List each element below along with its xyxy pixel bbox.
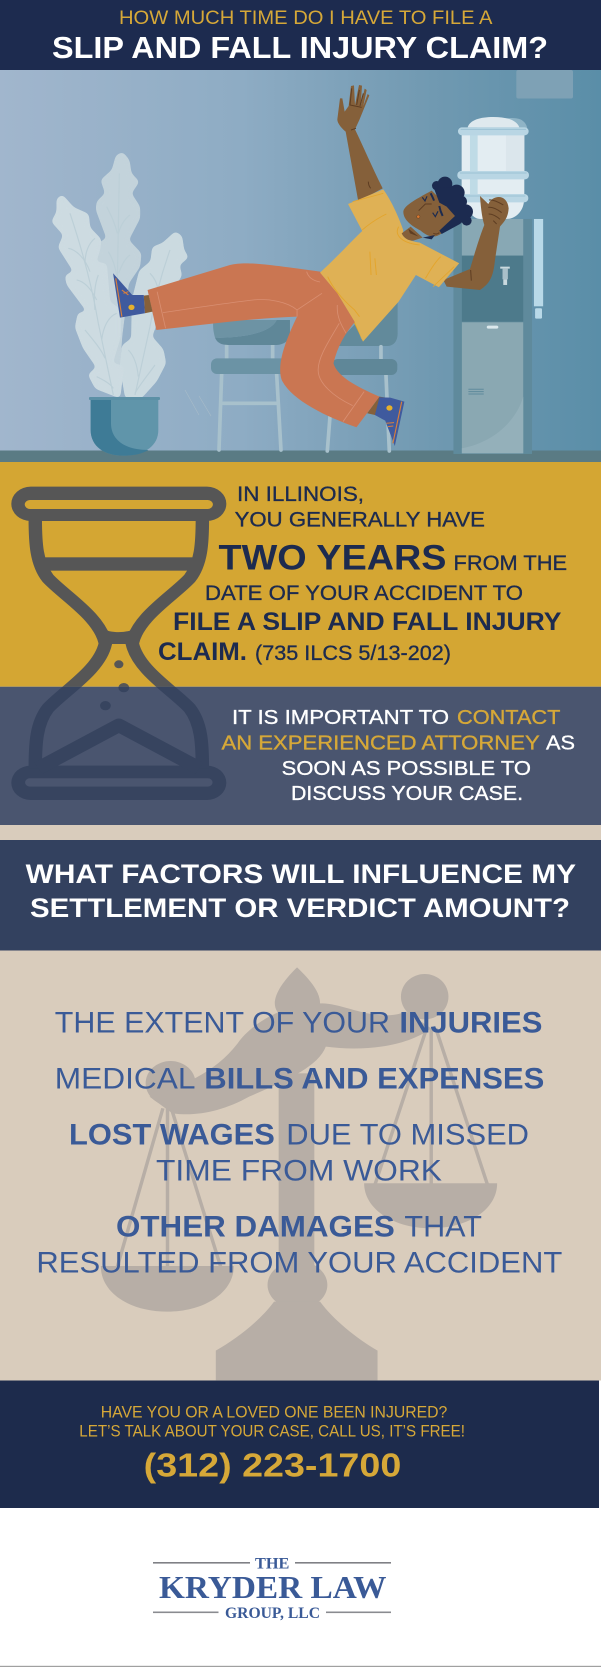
right shoe — [375, 397, 404, 446]
header line one: HOW MUCH TIME DO I HAVE TO FILE A — [119, 7, 492, 29]
falling man — [113, 85, 509, 446]
slate attorney panel — [0, 687, 601, 825]
bottle — [457, 117, 529, 219]
factor: lost wages: TIME FROM WORK — [156, 1155, 442, 1188]
call to action band: HAVE YOU OR A LOVED ONE BEEN INJURED? — [101, 1403, 447, 1421]
attorney text: AS — [546, 731, 575, 754]
factor: injuries: INJURIES — [399, 1007, 542, 1040]
floor — [0, 450, 601, 462]
attorney text: IT IS IMPORTANT TO — [232, 706, 449, 729]
factors heading band: WHAT FACTORS WILL INFLUENCE MY — [26, 859, 576, 889]
factor: injuries — [55, 1007, 542, 1040]
raised arm and hand — [337, 85, 383, 202]
factors panel — [0, 950, 601, 1380]
statute text: FILE A SLIP AND FALL INJURY — [173, 609, 562, 636]
factor: other damages: THAT — [404, 1210, 482, 1243]
wall panel — [516, 70, 573, 98]
lower arm and fist — [443, 196, 509, 290]
shirt — [320, 189, 459, 342]
potted plant — [51, 152, 189, 456]
factors heading band: SETTLEMENT OR VERDICT AMOUNT? — [30, 893, 570, 923]
factor: other damages: OTHER DAMAGES — [116, 1210, 395, 1243]
shirt tail — [353, 322, 363, 342]
ankles — [144, 295, 153, 313]
left shoe — [113, 273, 145, 318]
gold statute panel — [0, 462, 601, 687]
icon: hourglass top half — [11, 486, 226, 687]
attorney text: AN EXPERIENCED ATTORNEY — [222, 731, 540, 754]
beige divider strip — [0, 825, 601, 840]
neck — [402, 227, 423, 241]
logo: The Kryder Law Group — [153, 1555, 391, 1622]
statute text: IN ILLINOIS, — [237, 482, 364, 506]
factor: lost wages: LOST WAGES — [69, 1118, 275, 1151]
header banner — [0, 0, 601, 70]
motion lines — [185, 390, 449, 513]
factor: other damages — [36, 1210, 562, 1279]
factor: lost wages — [69, 1118, 529, 1188]
factor: injuries: THE EXTENT OF YOUR — [55, 1007, 390, 1040]
statute text: CLAIM. — [158, 639, 247, 666]
call to action band — [0, 1380, 599, 1508]
statute text: DATE OF YOUR ACCIDENT TO — [205, 581, 523, 605]
water cooler — [453, 117, 543, 454]
chairs — [211, 297, 398, 451]
logo: The Kryder Law Group: THE — [255, 1555, 289, 1572]
factor: medical bills: BILLS AND EXPENSES — [204, 1063, 544, 1096]
factor: lost wages: DUE TO MISSED — [286, 1118, 529, 1151]
phone number: (312) 223-1700 — [144, 1448, 401, 1485]
statute text: YOU GENERALLY HAVE — [235, 508, 485, 532]
attorney text: SOON AS POSSIBLE TO — [282, 757, 531, 780]
hair — [423, 177, 473, 239]
factors heading band — [0, 840, 601, 950]
head — [403, 191, 458, 236]
hero illustration: man slipping near water cooler — [0, 70, 601, 513]
statute text — [158, 482, 567, 666]
pants — [148, 263, 379, 427]
attorney text: CONTACT — [457, 706, 561, 729]
attorney text: DISCUSS YOUR CASE. — [291, 782, 523, 805]
factor: medical bills: MEDICAL — [55, 1063, 195, 1096]
header line two: SLIP AND FALL INJURY CLAIM? — [52, 30, 548, 65]
attorney text — [222, 706, 575, 805]
logo: The Kryder Law Group: GROUP, LLC — [225, 1605, 320, 1622]
icon: scales of justice — [101, 967, 497, 1380]
statute text: FROM THE — [454, 551, 567, 575]
face details — [422, 193, 443, 217]
logo: The Kryder Law Group: KRYDER LAW — [159, 1569, 386, 1605]
icon: hourglass bottom half — [12, 686, 226, 800]
statute text: (735 ILCS 5/13-202) — [255, 641, 451, 665]
call to action band: LET’S TALK ABOUT YOUR CASE, CALL US, IT’S FREE! — [79, 1422, 465, 1440]
factor: medical bills — [55, 1063, 544, 1096]
factor: other damages: RESULTED FROM YOUR ACCIDENT — [36, 1246, 562, 1279]
statute text: TWO YEARS — [218, 538, 446, 577]
